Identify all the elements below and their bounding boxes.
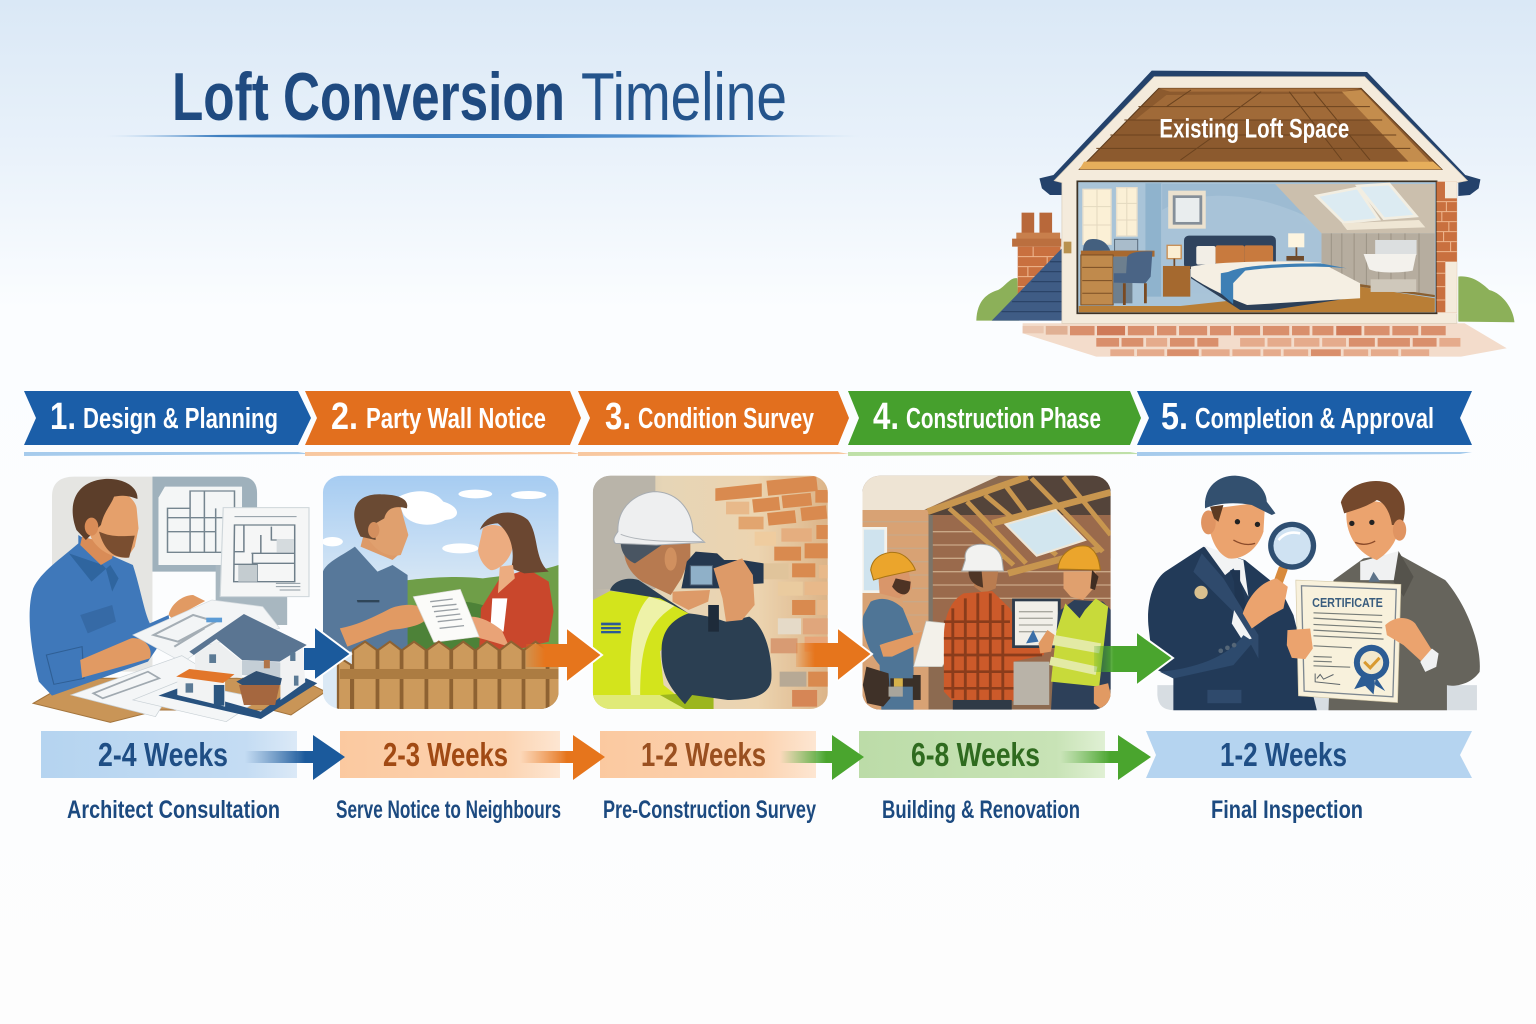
notice paper — [413, 589, 479, 642]
navy roof edge — [1039, 71, 1480, 196]
floor plan sheet — [220, 508, 309, 597]
chimney — [1012, 213, 1061, 297]
hi-vis vest — [593, 591, 692, 708]
ribbon 5: 5. — [1161, 396, 1188, 438]
title: Loft Conversion — [172, 59, 565, 135]
certificate: CERTIFICATE — [1312, 595, 1383, 610]
ribbon 4 — [848, 391, 1141, 456]
bedroom cutaway — [1077, 181, 1457, 314]
ribbon 4: 4. — [873, 396, 899, 438]
backdrop — [1157, 685, 1477, 710]
clipboard — [1014, 600, 1059, 653]
hands — [672, 558, 755, 622]
ceiling — [862, 476, 999, 510]
floor plan poster — [152, 477, 287, 625]
house cutaway illustration — [976, 71, 1514, 357]
duration bar 1 — [41, 731, 345, 780]
duration bar 1: 2-4 Weeks — [98, 736, 228, 773]
loft roof timber — [1079, 88, 1442, 169]
worker in plaid shirt — [944, 544, 1044, 710]
panel 4: construction phase — [862, 476, 1124, 710]
wooden fence — [338, 642, 560, 710]
house model — [158, 614, 317, 719]
wall picture — [1168, 191, 1206, 229]
jacket — [610, 579, 771, 704]
panel 1: design and planning — [30, 477, 326, 722]
panel 2: party wall notice — [322, 476, 560, 710]
bushes — [976, 276, 1514, 322]
arrow: step 2 to 3 — [526, 628, 602, 682]
duration bar 3 — [600, 731, 864, 780]
ribbon 2: 2. — [331, 396, 358, 438]
duration bar 4 — [859, 731, 1151, 780]
duration bar 2: 2-3 Weeks — [383, 736, 508, 773]
held plan and papers — [71, 600, 280, 722]
ribbon 1: Design & Planning — [83, 403, 278, 435]
dark rafters space — [928, 476, 1111, 558]
woman — [472, 512, 554, 650]
ribbon 3 — [578, 391, 849, 456]
arrow: step 3 to 4 — [796, 628, 872, 681]
ribbon 3: Condition Survey — [638, 403, 814, 435]
certificate — [1296, 580, 1401, 703]
head — [621, 540, 690, 595]
white hard hat — [614, 492, 705, 545]
slate roof extension — [992, 248, 1062, 321]
drawing table — [33, 678, 326, 722]
step caption 3: Pre-Construction Survey — [603, 796, 816, 824]
brick foundation — [1023, 323, 1507, 357]
worker with vest — [1049, 545, 1111, 710]
worker left — [862, 552, 923, 710]
title underline — [105, 134, 860, 138]
ribbon 1 — [24, 391, 311, 456]
wall background — [52, 477, 152, 672]
ribbon 4: Construction Phase — [906, 403, 1101, 435]
ribbon 1: 1. — [50, 396, 76, 438]
ribbon 5: Completion & Approval — [1195, 403, 1434, 435]
trees — [396, 565, 558, 652]
cream house frame — [1054, 77, 1467, 323]
brick walls — [862, 510, 1111, 710]
clouds — [322, 490, 546, 553]
house label: Existing Loft Space — [1159, 113, 1349, 143]
step caption 4: Building & Renovation — [882, 796, 1080, 824]
bed — [1184, 236, 1360, 310]
architect man — [30, 479, 205, 696]
step ribbons — [24, 391, 1472, 456]
duration bar 5: 1-2 Weeks — [1220, 736, 1347, 773]
step caption 1: Architect Consultation — [67, 796, 280, 824]
camera — [681, 552, 764, 632]
step caption 2: Serve Notice to Neighbours — [336, 796, 561, 824]
right brick wall — [1437, 182, 1457, 312]
arrow: step 4 to 5 — [1094, 632, 1173, 685]
ribbon 2 — [305, 391, 581, 456]
title: Timeline — [581, 59, 787, 135]
step caption 5: Final Inspection — [1211, 796, 1363, 824]
timber rafters — [928, 477, 1111, 573]
brick wall — [715, 476, 828, 707]
approver in grey suit — [1328, 481, 1480, 710]
skylights — [1317, 184, 1425, 230]
hands on certificate — [1287, 618, 1432, 662]
held plans — [913, 620, 945, 667]
skylight — [1006, 510, 1085, 556]
ribbon 5 — [1137, 391, 1472, 456]
bedside tables and lamps — [1163, 233, 1304, 297]
panel 3: condition survey — [593, 476, 828, 709]
desk and chair — [1081, 239, 1155, 305]
ribbon 3: 3. — [605, 396, 631, 438]
side window — [862, 528, 886, 592]
panel 5: completion and approval — [1148, 476, 1480, 710]
duration bar 5 — [1146, 731, 1472, 778]
basin and shelf — [1364, 240, 1417, 292]
magnifying glass — [1268, 522, 1316, 585]
man — [323, 494, 428, 652]
inspector hand — [1243, 578, 1288, 628]
windows — [1083, 188, 1137, 244]
duration bar 2 — [340, 731, 605, 780]
inspector in navy suit — [1148, 476, 1317, 710]
arrow: step 1 to 2 — [304, 627, 351, 680]
ribbon 2: Party Wall Notice — [366, 403, 546, 435]
duration bar 3: 1-2 Weeks — [641, 736, 766, 773]
duration bar 4: 6-8 Weeks — [911, 736, 1040, 773]
